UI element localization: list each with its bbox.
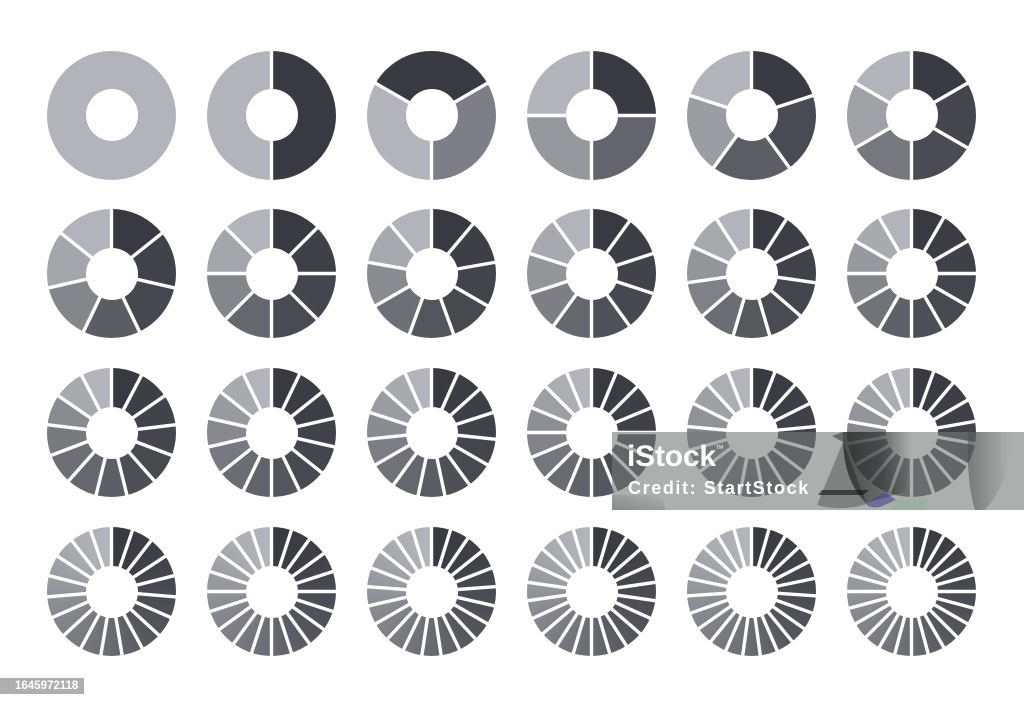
watermark abstract shapes [612, 432, 1004, 510]
image id tag: 1645972118 [15, 680, 78, 692]
donut: 16 segments [527, 368, 656, 497]
donut: 4 segments [527, 50, 656, 180]
donut: 1 segment [47, 50, 176, 180]
donut: 3 segments [367, 50, 496, 180]
donut: 14 segments [207, 368, 336, 497]
donut: 7 segments [47, 209, 176, 338]
donut: 22 segments [527, 527, 656, 656]
donut: 6 segments [847, 50, 976, 180]
donut: 15 segments [367, 368, 496, 497]
donut: 5 segments [687, 50, 816, 180]
watermark banner [612, 432, 1024, 510]
donut: 11 segments [687, 209, 816, 338]
donut: 24 segments [847, 527, 976, 656]
donut: 20 segments [207, 527, 336, 656]
watermark logo: iStock [627, 440, 716, 473]
donut: 10 segments [527, 209, 656, 338]
donut: 13 segments [47, 368, 176, 497]
watermark credit: Credit: StartStock [628, 478, 810, 498]
donut: 9 segments [367, 209, 496, 338]
trademark mark: TM [716, 445, 723, 451]
donut: 23 segments [687, 527, 816, 656]
image id tag [0, 678, 84, 694]
donut: 8 segments [207, 209, 336, 338]
donut: 2 segments [207, 50, 336, 180]
donut: 12 segments [847, 209, 976, 338]
donut: 17 segments [687, 368, 816, 497]
donut: 18 segments [847, 368, 976, 497]
donut: 19 segments [47, 527, 176, 656]
donut: 21 segments [367, 527, 496, 656]
